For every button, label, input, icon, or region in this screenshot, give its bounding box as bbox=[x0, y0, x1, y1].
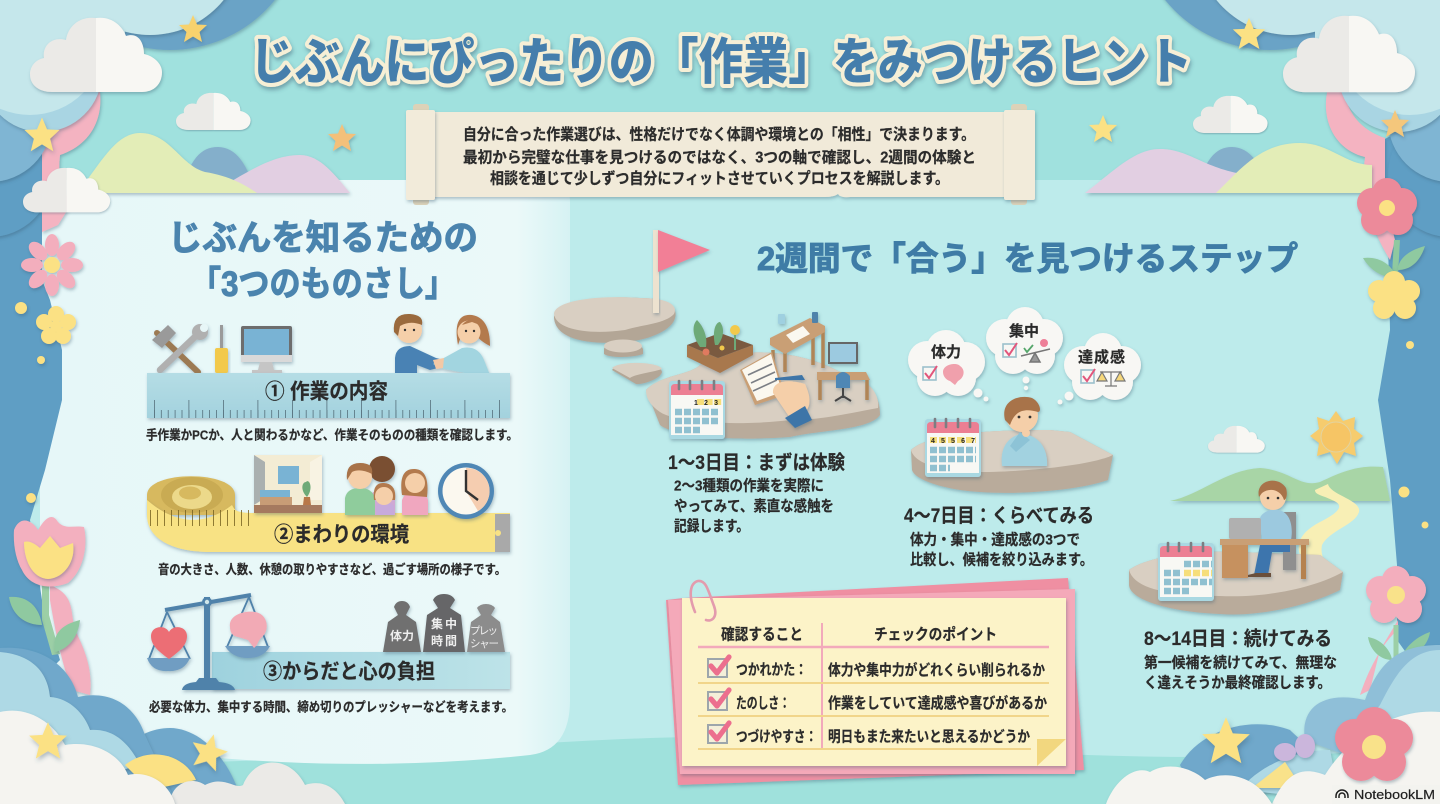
weight: pressure bbox=[467, 604, 505, 652]
icon: sun bbox=[1310, 411, 1363, 464]
step 2 text: 体力・集中・達成感の3つで bbox=[910, 530, 1080, 548]
NotebookLM badge bbox=[1332, 785, 1440, 804]
cloud: top-left large bbox=[30, 18, 162, 92]
back sheets bbox=[666, 578, 1084, 785]
step 3 heading: 8〜14日目：続けてみる bbox=[1144, 628, 1332, 650]
icon: calendar 1 bbox=[669, 381, 725, 439]
thought cloud: focus: 集中 bbox=[1009, 322, 1039, 340]
star: top-right bbox=[1233, 18, 1265, 49]
weight: physical: 体力 bbox=[390, 628, 414, 643]
icon: calendar 2: 4 5 5 6 7 bbox=[931, 438, 975, 445]
step 3 text bbox=[1144, 654, 1337, 692]
step 2: thought clouds and person bbox=[908, 307, 1141, 493]
step 3 text: 第一候補を続けてみて、無理な bbox=[1144, 654, 1337, 672]
table lines bbox=[698, 623, 1049, 749]
icon: desk with paper bbox=[770, 312, 825, 372]
icon: calendar 2 bbox=[925, 419, 981, 477]
icon: calendar 1: 1 2 3 bbox=[694, 400, 718, 407]
icon: handshake people bbox=[394, 314, 492, 382]
item 3: balance scale bbox=[147, 594, 513, 714]
heading: two-week steps: 2週間で「合う」を見つけるステップ bbox=[757, 240, 1298, 277]
weight: focus time: 時間 bbox=[431, 633, 457, 648]
icon: room bbox=[254, 455, 322, 513]
cloud: left lower bbox=[23, 168, 110, 212]
step 3 text: く違えそうか最終確認します。 bbox=[1144, 674, 1331, 692]
ruler 1 bbox=[147, 373, 510, 418]
scroll text line 2: 最初から完璧な仕事を見つけるのではなく、3つの軸で確認し、2週間の体験と bbox=[463, 148, 976, 166]
note paper bbox=[682, 598, 1066, 766]
scroll text line 3: 相談を通じて少しずつ自分にフィットさせていくプロセスを解説します。 bbox=[490, 168, 949, 188]
star: bottom-left second bbox=[187, 730, 231, 773]
ruler 1 description: 手作業かPCか、人と関わるかなど、作業そのものの種類を確認します。 bbox=[146, 426, 518, 442]
weight: focus time: 集中 bbox=[431, 616, 457, 631]
paperclip bbox=[691, 581, 715, 620]
icon: family bbox=[345, 456, 428, 515]
flower: bottom-right red bbox=[1335, 707, 1413, 781]
thought cloud: stamina: 体力 bbox=[931, 344, 961, 361]
step 2 text bbox=[910, 530, 1093, 568]
header: check point: チェックのポイント bbox=[874, 626, 997, 644]
thought cloud: achievement bbox=[1058, 333, 1141, 404]
weight: pressure: シャー bbox=[470, 638, 499, 650]
decoration: top-left paper clouds bbox=[0, 0, 305, 720]
star: bottom-left bbox=[29, 722, 67, 759]
star: bottom-right bbox=[1202, 717, 1250, 763]
step 1 text: やってみて、素直な感触を bbox=[674, 497, 834, 515]
person thinking bbox=[1002, 397, 1047, 466]
title: じぶんにぴったりの「作業」をみつけるヒント bbox=[250, 34, 1192, 90]
flag and stepping stones bbox=[554, 230, 710, 384]
step 3: sun, hills and person at desk bbox=[1129, 411, 1390, 614]
header: what to check: 確認すること bbox=[721, 624, 803, 644]
panel: left pale background bbox=[40, 180, 570, 764]
person at desk bbox=[1220, 481, 1309, 579]
heading: three measures line 2: 「3つのものさし」 bbox=[190, 265, 456, 304]
flower: left tulip bbox=[9, 517, 91, 695]
row 2 bbox=[708, 690, 1047, 712]
item 2: tape measure bbox=[147, 455, 510, 577]
island bbox=[1129, 552, 1343, 614]
star: right orange bbox=[1381, 110, 1409, 137]
step 1 text bbox=[674, 476, 834, 535]
bar label: ③からだと心の負担 bbox=[263, 660, 435, 684]
sticky note checklist bbox=[666, 578, 1084, 785]
decoration: bottom-left clouds bbox=[0, 648, 345, 804]
thought cloud: achievement: 達成感 bbox=[1078, 348, 1125, 366]
icon: clock bbox=[438, 463, 494, 519]
cloud: left small bbox=[176, 93, 251, 130]
thought cloud: focus bbox=[986, 307, 1063, 390]
decoration: left hills bbox=[77, 133, 350, 193]
thought cloud: stamina bbox=[908, 330, 988, 402]
hills and path bbox=[1170, 467, 1390, 565]
star: top-left bbox=[179, 15, 207, 42]
row 1 bbox=[708, 657, 1045, 679]
icon: monitor bbox=[241, 326, 292, 374]
bar description: 必要な体力、集中する時間、締め切りのプレッシャーなどを考えます。 bbox=[149, 698, 513, 714]
step 2 text: 比較し、候補を絞り込みます。 bbox=[910, 550, 1093, 568]
icon: scale with heart and brain bbox=[147, 595, 270, 690]
row 3: つづけやすさ： bbox=[736, 728, 817, 746]
row 2: たのしさ： bbox=[736, 695, 790, 712]
icon: hammer and wrench bbox=[152, 324, 208, 372]
icon: computer desk bbox=[817, 342, 870, 401]
flower: left yellow with dots bbox=[15, 302, 76, 503]
star: left yellow bbox=[24, 118, 60, 151]
step 1: island illustration bbox=[646, 312, 880, 439]
row 3 bbox=[708, 723, 1030, 746]
star: orange bbox=[328, 124, 356, 151]
weight: pressure: プレッ bbox=[470, 625, 498, 637]
island bbox=[911, 430, 1113, 493]
row 2: 作業をしていて達成感や喜びがあるか bbox=[828, 694, 1047, 712]
weight: focus time bbox=[423, 594, 465, 652]
folded corner bbox=[1037, 739, 1066, 766]
icon: calendar 3 bbox=[1158, 543, 1214, 601]
tape body and roll bbox=[147, 476, 510, 552]
icon: weights bbox=[383, 594, 505, 652]
step 2 heading: 4〜7日目：くらべてみる bbox=[904, 505, 1094, 527]
scroll text line 1: 自分に合った作業選びは、性格だけでなく体調や環境との「相性」で決まります。 bbox=[463, 124, 975, 144]
heading: three measures line 1: じぶんを知るための bbox=[168, 219, 478, 258]
blue bar bbox=[212, 652, 510, 689]
cloud: top-right large bbox=[1283, 16, 1415, 92]
decoration: bottom-right clouds and flower bbox=[1106, 566, 1440, 804]
tape label: ②まわりの環境 bbox=[274, 524, 409, 546]
NotebookLM badge: NotebookLM bbox=[1354, 788, 1435, 802]
flower: right pink with yellow cluster bbox=[1357, 178, 1428, 528]
scroll banner bbox=[406, 104, 1035, 205]
flower: left pink bbox=[21, 234, 83, 296]
row 1: 体力や集中力がどれくらい削られるか bbox=[828, 661, 1045, 679]
item 1: tools and people above ruler bbox=[146, 314, 518, 442]
step 1 heading: 1〜3日目：まずは体験 bbox=[668, 452, 845, 474]
cloud: small near sun bbox=[1208, 426, 1265, 453]
step 1 text: 2〜3種類の作業を実際に bbox=[674, 476, 824, 494]
tape description: 音の大きさ、人数、休憩の取りやすさなど、過ごす場所の様子です。 bbox=[158, 561, 506, 577]
cloud: right small bbox=[1193, 96, 1268, 133]
island bbox=[646, 352, 880, 439]
icon: NotebookLM logo bbox=[1336, 790, 1348, 798]
decoration: top-right paper clouds bbox=[1135, 0, 1440, 700]
star: right yellow bbox=[1089, 115, 1117, 142]
row 3: 明日もまた来たいと思えるかどうか bbox=[828, 728, 1030, 746]
row 1: つかれかた： bbox=[736, 662, 807, 678]
decoration: right hills bbox=[1085, 143, 1372, 193]
icon: notepad and hand bbox=[740, 352, 812, 428]
icon: planter bbox=[687, 320, 753, 373]
ruler 1 label: ① 作業の内容 bbox=[265, 380, 388, 404]
step 1 text: 記録します。 bbox=[674, 517, 749, 535]
icon: screwdriver bbox=[215, 325, 228, 373]
